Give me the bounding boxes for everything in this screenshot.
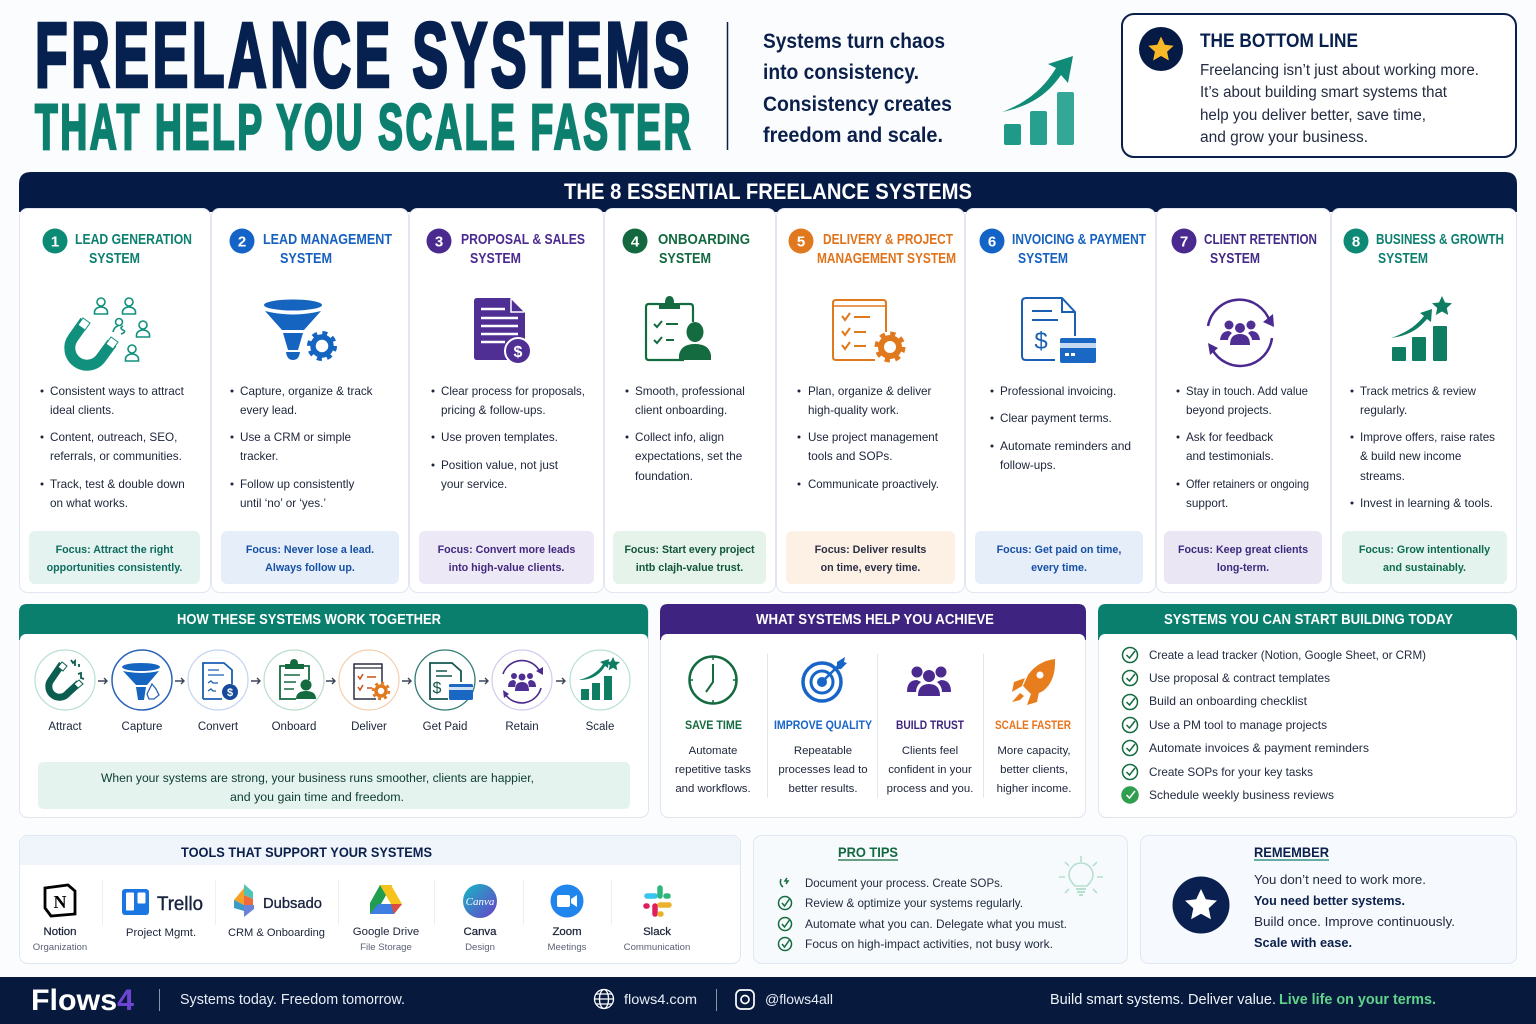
number badge 4: 4 — [631, 234, 640, 250]
message: You don’t need to work more. — [1254, 872, 1426, 887]
tool: canva: Canva — [464, 926, 497, 938]
bullet list: expectations, set the — [635, 450, 742, 463]
title — [35, 3, 690, 164]
flow step: convert: Convert — [198, 721, 239, 733]
bullet list: your service. — [441, 478, 507, 491]
panel: system 7 client retention — [1156, 208, 1330, 592]
title: THAT HELP YOU SCALE FASTER — [35, 93, 690, 164]
tool: notion — [33, 885, 87, 953]
focus box — [1164, 531, 1322, 584]
focus box: on time, every time. — [821, 562, 920, 574]
tool: dubsado: Dubsado — [263, 895, 322, 912]
callout: the bottom line: and grow your business. — [1200, 129, 1368, 146]
handle: @flows4all — [765, 991, 833, 1007]
focus box: Focus: Convert more leads — [438, 544, 575, 556]
bullet list: Follow up consistently — [240, 478, 354, 491]
arrow — [479, 678, 488, 684]
achievement: scale faster: SCALE FASTER — [995, 720, 1072, 732]
heading: ONBOARDING — [658, 231, 750, 248]
tagline: Systems turn chaos — [763, 30, 945, 53]
heading — [461, 231, 585, 267]
heading — [658, 231, 750, 267]
focus box — [975, 531, 1143, 584]
panel: system 2 lead management — [212, 208, 408, 592]
number badge 8: 8 — [1352, 234, 1360, 250]
checklist: Build an onboarding checklist — [1149, 695, 1308, 708]
tool: dubsado — [228, 884, 325, 939]
number badge 2: 2 — [238, 234, 246, 250]
closing line: Build smart systems. Deliver value. — [1050, 992, 1276, 1008]
number badge 3: 3 — [435, 234, 443, 250]
message: Build once. Improve continuously. — [1254, 914, 1455, 929]
panel: how these systems work together — [19, 604, 648, 818]
panel: system 4 onboarding — [604, 208, 776, 592]
bullet list: Ask for feedback — [1186, 431, 1273, 444]
bullet list: Automate reminders and — [1000, 440, 1131, 453]
tips list — [778, 877, 1067, 951]
achievement: scale faster: More capacity, — [997, 745, 1071, 757]
arrow — [251, 678, 260, 684]
icon: rocket — [1012, 659, 1055, 705]
bullet list: Stay in touch. Add value — [1186, 385, 1308, 398]
icon: magnet attracting people — [70, 298, 150, 365]
focus box: into high-value clients. — [449, 562, 564, 574]
achievement: improve quality: IMPROVE QUALITY — [774, 720, 872, 732]
bullet list: Invest in learning & tools. — [1360, 497, 1493, 510]
tagline: into consistency. — [763, 61, 919, 84]
icon: funnel with gear — [264, 300, 335, 360]
focus box: Focus: Start every project — [624, 544, 755, 556]
icon: instagram — [736, 990, 754, 1009]
number badge 1: 1 — [51, 234, 59, 250]
bullet list: referrals, or communities. — [50, 450, 182, 463]
focus box: Focus: Attract the right — [56, 544, 174, 556]
panel header: HOW THESE SYSTEMS WORK TOGETHER — [177, 612, 441, 628]
flow step: scale: Scale — [586, 721, 614, 733]
tool: slack: Slack — [643, 926, 671, 938]
callout: the bottom line: Freelancing isn’t just about working more. — [1200, 62, 1479, 79]
flow step: attract — [35, 650, 95, 733]
focus box: and sustainably. — [1383, 562, 1466, 574]
callout: the bottom line: THE BOTTOM LINE — [1200, 31, 1358, 52]
bullet list: Capture, organize & track — [240, 385, 373, 398]
tagline — [763, 30, 952, 147]
tips list: Review & optimize your systems regularly. — [805, 897, 1023, 910]
icon: proposal document with dollar: $ — [514, 344, 523, 361]
bullet list: Clear process for proposals, — [441, 385, 585, 398]
number badge 1 — [42, 228, 68, 254]
icon: checklist with gear — [833, 300, 904, 360]
icon: star badge — [1172, 876, 1230, 934]
bullet list — [1176, 385, 1309, 510]
flow step: convert: $ — [227, 687, 233, 699]
checklist: Automate invoices & payment reminders — [1149, 742, 1369, 755]
number badge 8 — [1344, 228, 1368, 254]
bullet list: on what works. — [50, 497, 128, 510]
heading: SYSTEM — [280, 250, 332, 267]
heading: PROPOSAL & SALES — [461, 231, 585, 248]
focus box: opportunities consistently. — [47, 562, 182, 574]
number badge 5: 5 — [797, 234, 805, 250]
focus box: long-term. — [1217, 562, 1269, 574]
message: You need better systems. — [1254, 893, 1405, 908]
achievement: build trust — [887, 666, 973, 795]
tool: zoom: Zoom — [552, 926, 582, 938]
heading: REMEMBER — [1254, 844, 1329, 860]
checklist: Create a lead tracker (Notion, Google Sheet, or CRM) — [1149, 649, 1426, 662]
tool: notion: N — [54, 892, 66, 912]
heading — [1376, 231, 1504, 267]
bullet list: & build new income — [1360, 450, 1461, 463]
achievement: improve quality: better results. — [788, 783, 858, 795]
icon: retention cycle with people — [1208, 300, 1274, 366]
heading — [1204, 231, 1317, 267]
bullet list: until ‘no’ or ‘yes.’ — [240, 497, 326, 510]
focus box: Focus: Keep great clients — [1178, 544, 1308, 556]
icon: clock — [690, 656, 736, 704]
heading — [263, 231, 392, 267]
icon: invoice with card: $ — [1034, 328, 1048, 355]
flow step: get paid — [415, 650, 475, 733]
panel: pro tips — [754, 836, 1128, 964]
flow step: scale — [570, 650, 630, 733]
achievement: save time: Automate — [689, 745, 737, 757]
message: Scale with ease. — [1254, 935, 1352, 950]
flow step: onboard: Onboard — [272, 721, 316, 733]
bullet list: Use project management — [808, 431, 939, 444]
panel: remember — [1140, 836, 1516, 964]
focus box: Focus: Get paid on time, — [997, 544, 1121, 556]
icon: globe — [594, 990, 614, 1008]
heading: CLIENT RETENTION — [1204, 231, 1317, 248]
heading — [817, 231, 956, 267]
arrow — [402, 678, 411, 684]
focus box — [419, 531, 594, 584]
bullet list — [990, 385, 1131, 472]
checklist: Use proposal & contract templates — [1149, 672, 1330, 685]
bullet list: ideal clients. — [50, 404, 114, 417]
tips list: Document your process. Create SOPs. — [805, 877, 1003, 890]
icon: growth chart with arrow — [1002, 56, 1074, 145]
icon: invoice with card — [1022, 298, 1096, 363]
icon: proposal document with dollar — [474, 298, 531, 364]
bullet list: Collect info, align — [635, 431, 724, 444]
panel header — [1098, 604, 1517, 640]
heading: SYSTEM — [1018, 250, 1068, 267]
slogan: Systems today. Freedom tomorrow. — [180, 992, 405, 1008]
closing line — [1050, 992, 1436, 1008]
focus box: intb clajh-value trust. — [636, 562, 743, 574]
achievement: scale faster — [995, 659, 1072, 795]
tool: google drive: Google Drive — [353, 926, 419, 938]
tool: slack: Communication — [624, 942, 690, 953]
tool: google drive — [353, 885, 419, 953]
tips list: Focus on high-impact activities, not busy work. — [805, 938, 1053, 951]
heading: SYSTEM — [1210, 250, 1260, 267]
bullet list — [230, 385, 373, 510]
checklist: Create SOPs for your key tasks — [1149, 766, 1313, 779]
bullet list — [40, 385, 185, 510]
arrow — [326, 678, 335, 684]
tagline: freedom and scale. — [763, 124, 943, 147]
flow step: get paid: $ — [433, 680, 442, 697]
tool: dubsado: CRM & Onboarding — [228, 927, 325, 939]
achievement: build trust: confident in your — [888, 764, 972, 776]
panel: system 3 proposal and sales — [410, 208, 604, 592]
bullet list — [432, 385, 585, 491]
bullet list: regularly. — [1360, 404, 1407, 417]
tool: trello: Trello — [157, 893, 203, 915]
focus box — [1342, 531, 1507, 584]
icon: light bulb — [1059, 856, 1103, 895]
tool: trello: Project Mgmt. — [126, 927, 196, 939]
logo: Flows4 — [31, 984, 134, 1017]
panel header — [19, 604, 648, 640]
bullet list — [798, 385, 939, 491]
bullet list: Use proven templates. — [441, 431, 558, 444]
heading — [1012, 231, 1146, 267]
focus box — [786, 531, 955, 584]
panel: system 6 invoicing and payment — [966, 208, 1156, 592]
number badge 7: 7 — [1180, 234, 1188, 250]
panel header — [660, 604, 1086, 640]
closing line: Live life on your terms. — [1279, 992, 1436, 1008]
message — [1254, 872, 1455, 950]
achievement: save time: repetitive tasks — [675, 764, 751, 776]
focus box — [221, 531, 399, 584]
tool: canva: Canva — [466, 896, 495, 908]
bullet list: Consistent ways to attract — [50, 385, 185, 398]
section banner: the 8 essential systems — [19, 172, 1517, 212]
achievement: save time — [675, 656, 751, 795]
bullet list: Offer retainers or ongoing — [1186, 478, 1309, 491]
flow step: attract: Attract — [48, 721, 82, 733]
focus box: Focus: Grow intentionally — [1359, 544, 1490, 556]
number badge 2 — [230, 228, 254, 254]
bullet list: Track, test & double down — [50, 478, 185, 491]
flow step: capture — [112, 650, 172, 733]
flow step: capture: Capture — [122, 721, 162, 733]
website: flows4.com — [624, 991, 697, 1007]
flow step: get paid: Get Paid — [423, 721, 467, 733]
callout: the bottom line — [1122, 14, 1516, 157]
heading: DELIVERY & PROJECT — [823, 231, 953, 248]
focus box: Always follow up. — [265, 562, 355, 574]
heading: MANAGEMENT SYSTEM — [817, 250, 956, 267]
tips list: Automate what you can. Delegate what you must. — [805, 918, 1067, 931]
panel header: WHAT SYSTEMS HELP YOU ACHIEVE — [756, 612, 994, 628]
achievement: save time: SAVE TIME — [685, 720, 742, 732]
arrow — [556, 678, 565, 684]
focus box — [613, 531, 766, 584]
panel header: TOOLS THAT SUPPORT YOUR SYSTEMS — [181, 844, 432, 860]
bullet list — [1350, 385, 1495, 510]
flow step: convert — [188, 650, 248, 733]
heading: LEAD GENERATION — [75, 231, 192, 248]
bullet list: Use a CRM or simple — [240, 431, 351, 444]
callout: the bottom line: It’s about building smart systems that — [1200, 84, 1448, 101]
achievement: build trust: process and you. — [887, 783, 973, 795]
achievement: improve quality — [774, 657, 872, 795]
tool: google drive: File Storage — [360, 942, 412, 953]
tool: slack — [624, 888, 690, 953]
number badge 3 — [426, 228, 452, 254]
icon: people group — [907, 666, 951, 696]
flow step: retain: Retain — [505, 721, 539, 733]
panel: what systems help you achieve — [660, 604, 1086, 818]
heading: PRO TIPS — [838, 844, 898, 860]
callout: the bottom line: help you deliver better, save time, — [1200, 107, 1426, 124]
tagline: Consistency creates — [763, 93, 952, 116]
icon: target with arrow — [803, 657, 847, 701]
achievement: build trust: Clients feel — [902, 745, 958, 757]
arrow — [175, 678, 184, 684]
bullet list: pricing & follow-ups. — [441, 404, 546, 417]
flow step: retain — [492, 650, 552, 733]
bullet list: beyond projects. — [1186, 404, 1272, 417]
heading: INVOICING & PAYMENT — [1012, 231, 1146, 248]
focus box — [29, 531, 200, 584]
panel: system 5 delivery and project management — [776, 208, 964, 592]
icon: clipboard with person — [646, 296, 711, 360]
heading: LEAD MANAGEMENT — [263, 231, 392, 248]
bullet list: Track metrics & review — [1360, 385, 1477, 398]
number badge 4 — [622, 228, 648, 254]
tool: zoom — [548, 884, 587, 953]
summary note: and you gain time and freedom. — [230, 790, 404, 804]
bullet list: Professional invoicing. — [1000, 385, 1116, 398]
bullet list: streams. — [1360, 470, 1405, 483]
panel: systems you can start building today — [1098, 604, 1517, 818]
tool: notion: Organization — [33, 942, 87, 953]
title: FREELANCE SYSTEMS — [35, 3, 689, 106]
panel: tools that support your systems — [20, 836, 740, 964]
number badge 5 — [788, 228, 814, 254]
bullet list: tools and SOPs. — [808, 450, 892, 463]
focus box: every time. — [1031, 562, 1087, 574]
tool: trello — [122, 889, 203, 939]
bullet list: client onboarding. — [635, 404, 727, 417]
tool: canva: Design — [465, 942, 495, 953]
number badge 7 — [1172, 228, 1196, 254]
heading: SYSTEM — [659, 250, 711, 267]
tool: zoom: Meetings — [548, 942, 587, 953]
bullet list: foundation. — [635, 470, 693, 483]
bullet list: every lead. — [240, 404, 297, 417]
icon: growth bars with star — [1391, 296, 1452, 361]
icon: star badge — [1139, 27, 1183, 71]
heading: SYSTEM — [1378, 250, 1428, 267]
checklist: Schedule weekly business reviews — [1149, 789, 1334, 802]
bullet list: follow-ups. — [1000, 459, 1056, 472]
heading: SYSTEM — [89, 250, 140, 267]
achievement: improve quality: processes lead to — [778, 764, 868, 776]
bullet list: Improve offers, raise rates — [1360, 431, 1495, 444]
bullet list: tracker. — [240, 450, 278, 463]
bullet list: Smooth, professional — [635, 385, 745, 398]
panel header — [20, 836, 740, 865]
heading: BUSINESS & GROWTH — [1376, 231, 1504, 248]
achievement: scale faster: higher income. — [997, 783, 1071, 795]
flow step: onboard — [264, 650, 324, 733]
bullet list: high-quality work. — [808, 404, 899, 417]
focus box: Focus: Deliver results — [815, 544, 926, 556]
number badge 6 — [980, 228, 1004, 254]
summary note: When your systems are strong, your business runs smoother, clients are happier, — [101, 771, 534, 785]
checklist — [1122, 648, 1426, 803]
achievement: improve quality: Repeatable — [794, 745, 852, 757]
panel: system 1 lead generation — [20, 208, 210, 592]
summary note — [38, 762, 630, 809]
checklist: Use a PM tool to manage projects — [1149, 719, 1327, 732]
achievement: build trust: BUILD TRUST — [896, 720, 964, 732]
bullet list: Clear payment terms. — [1000, 412, 1112, 425]
bullet list: and testimonials. — [1186, 450, 1274, 463]
section banner: the 8 essential systems: THE 8 ESSENTIAL FREELANCE SYSTEMS — [564, 179, 972, 204]
focus box: Focus: Never lose a lead. — [246, 544, 374, 556]
panel header: SYSTEMS YOU CAN START BUILDING TODAY — [1164, 612, 1453, 628]
heading — [75, 231, 192, 267]
bullet list: Content, outreach, SEO, — [50, 431, 177, 444]
arrow — [98, 678, 107, 684]
bullet list — [626, 385, 745, 483]
bullet list: support. — [1186, 497, 1228, 510]
panel: system 8 business and growth — [1332, 208, 1516, 592]
heading: SYSTEM — [470, 250, 521, 267]
bullet list: Communicate proactively. — [808, 478, 939, 491]
flow step: deliver: Deliver — [351, 721, 387, 733]
tool: notion: Notion — [44, 926, 76, 938]
tool: canva — [463, 884, 497, 953]
achievement: save time: and workflows. — [675, 783, 751, 795]
number badge 6: 6 — [988, 234, 996, 250]
flow step: deliver — [339, 650, 399, 733]
achievement: scale faster: better clients, — [1000, 764, 1068, 776]
footer — [0, 977, 1536, 1024]
bullet list: Plan, organize & deliver — [808, 385, 932, 398]
bullet list: Position value, not just — [441, 459, 559, 472]
